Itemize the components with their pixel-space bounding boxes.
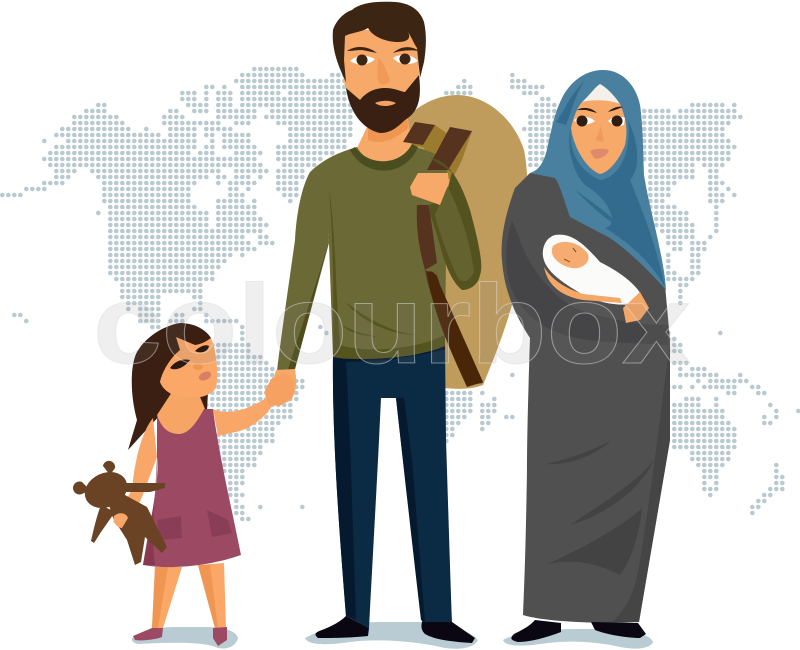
woman: dress folds	[545, 440, 654, 575]
teddy: ears	[73, 461, 115, 494]
man	[264, 2, 483, 643]
map: Africa fragment	[446, 375, 513, 441]
girl: shoes	[133, 627, 227, 646]
woman: hijab	[530, 70, 666, 290]
man: fist	[410, 173, 449, 205]
map: Central and South America	[140, 315, 303, 519]
baby: head	[552, 242, 589, 268]
woman: nose shade	[596, 125, 604, 142]
man: eyes	[350, 55, 418, 65]
woman: dress	[502, 168, 670, 623]
baby: mother's arm	[544, 267, 622, 303]
man: jeans dark seams	[333, 346, 445, 622]
woman: eyebrows	[577, 107, 623, 113]
woman: dress right shade	[612, 340, 670, 622]
girl: eyes	[170, 345, 209, 369]
girl: hair back	[128, 323, 211, 450]
girl: dress	[143, 409, 241, 567]
girl: pockets	[157, 510, 232, 540]
girl: legs	[152, 563, 226, 628]
man: mouth	[375, 101, 396, 106]
shadow: woman	[503, 629, 653, 649]
man: strap	[403, 122, 483, 385]
woman: shoes	[511, 620, 646, 642]
watermark: colourbox	[93, 262, 691, 387]
woman: lips	[590, 149, 609, 159]
man: right arm	[428, 158, 481, 290]
man: shirt torso	[310, 146, 447, 359]
girl: face	[160, 337, 217, 398]
woman: face	[571, 100, 626, 174]
teddy: head	[79, 465, 133, 515]
man: neck	[357, 112, 412, 165]
man: eyebrows	[347, 47, 419, 53]
baby: eyes closed	[564, 248, 576, 262]
woman: sleeve	[506, 220, 668, 345]
man: face	[343, 30, 419, 120]
girl: hand	[265, 372, 295, 406]
teddy: left limb	[91, 505, 115, 543]
shadow: girl	[132, 627, 238, 649]
man: collar	[350, 144, 418, 171]
girl: neck and chest	[157, 392, 205, 436]
man: left arm	[277, 172, 329, 371]
woman: eyes	[574, 117, 625, 126]
girl: arm behind teddy	[113, 488, 142, 528]
girl: raised arm	[213, 398, 272, 436]
girl: left arm	[133, 418, 157, 497]
shadow: man and feet	[305, 622, 478, 649]
man: nose shade	[378, 58, 390, 85]
dotted world map	[2, 69, 799, 519]
map: North America and Greenland	[2, 69, 351, 309]
teddy: body and legs	[108, 495, 167, 565]
man: left arm shadow	[288, 240, 329, 370]
woman: hijab shading	[556, 80, 665, 287]
bag on man's back	[400, 95, 528, 389]
girl: leg shade	[152, 565, 218, 628]
woman: head band	[582, 84, 620, 104]
map: Asia	[644, 105, 741, 303]
man: jeans	[333, 346, 452, 628]
map: Europe	[446, 75, 555, 165]
map: small islands left	[14, 315, 327, 333]
girl: teddy bear	[73, 461, 167, 565]
teddy: hand holding	[114, 513, 128, 528]
girl: nose	[193, 364, 203, 370]
girl: mouth	[197, 370, 213, 382]
man: hand holding girl	[264, 369, 296, 403]
man: shirt folds	[329, 190, 445, 359]
woman	[502, 70, 670, 642]
man: shoes	[315, 616, 475, 643]
baby: wrap	[543, 235, 644, 305]
map: south-east Asia and Australia	[668, 333, 799, 513]
baby: mother's hand	[623, 292, 649, 323]
teddy: arm	[125, 483, 165, 492]
baby	[543, 235, 649, 323]
girl: dress shade	[143, 457, 157, 565]
girl	[73, 323, 295, 646]
man: beard	[346, 75, 420, 133]
man: hair	[333, 2, 426, 82]
